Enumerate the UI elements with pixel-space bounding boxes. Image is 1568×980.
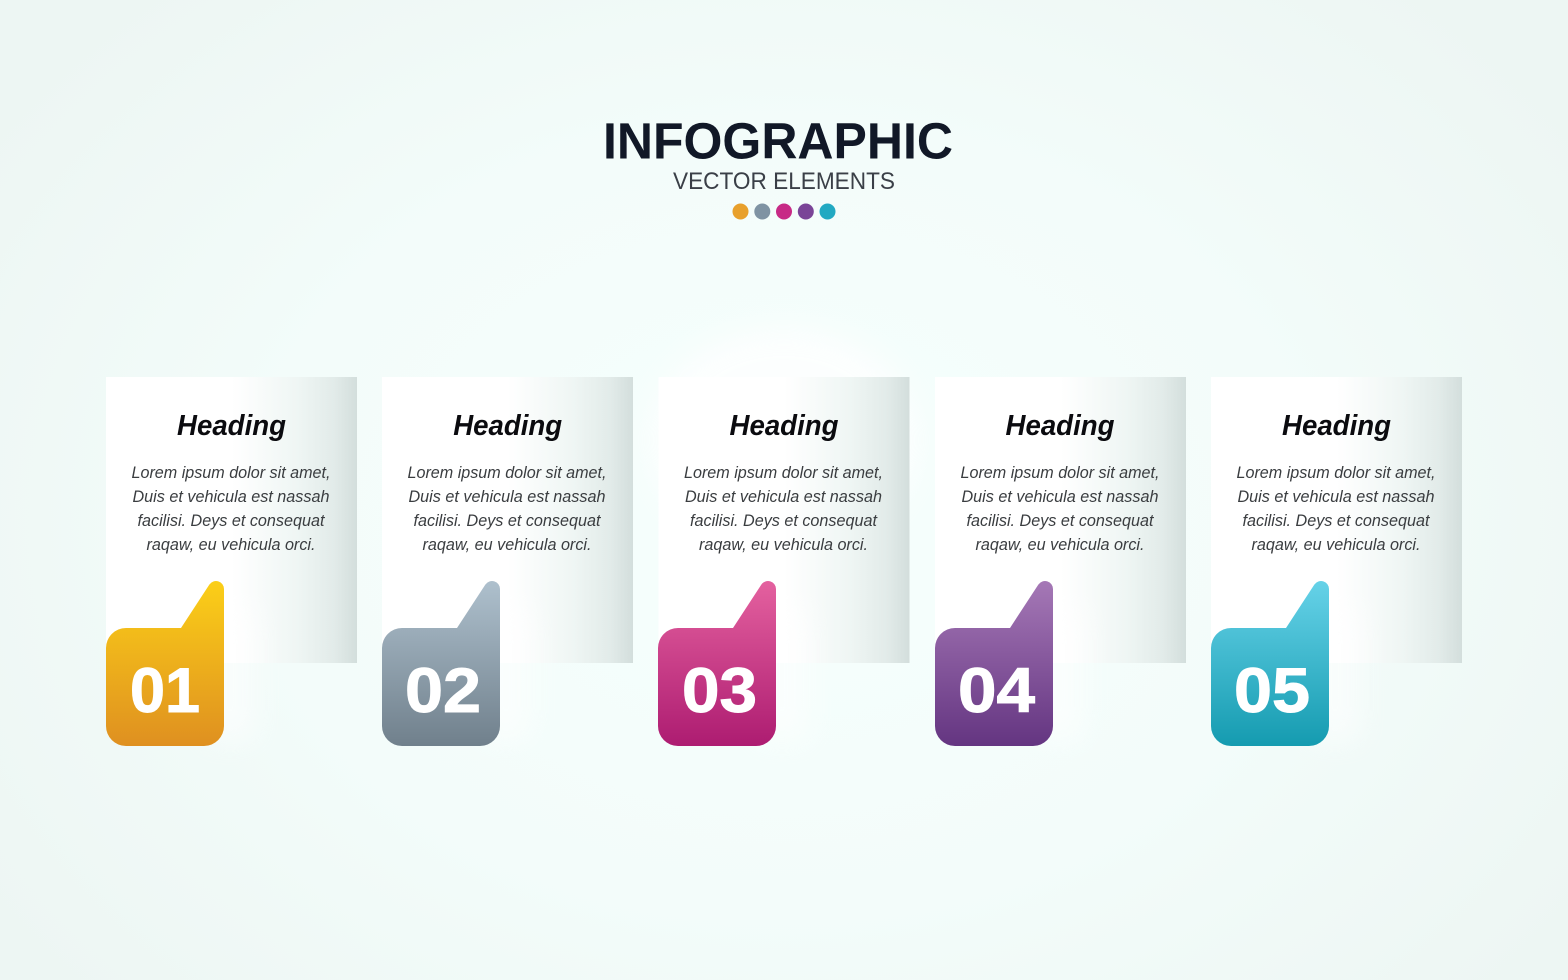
body text (1236, 464, 1436, 554)
body text (684, 464, 883, 554)
title block (603, 112, 953, 220)
body text: Duis et vehicula est nassah (132, 488, 330, 506)
body text: raqaw, eu vehicula orci. (146, 536, 316, 554)
card (106, 377, 357, 663)
colour dots (732, 204, 836, 220)
number tag (935, 581, 1083, 746)
heading: Heading (453, 410, 562, 442)
number tag (658, 581, 806, 746)
body text (960, 464, 1160, 554)
body text: Lorem ipsum dolor sit amet, (1236, 464, 1436, 482)
subtitle: VECTOR ELEMENTS (673, 168, 895, 195)
number tag: 01 (130, 656, 200, 726)
panel: step 05 (1211, 377, 1462, 746)
panel: step 01 (106, 377, 357, 746)
body text (408, 464, 606, 554)
body text: facilisi. Deys et consequat (1242, 512, 1431, 530)
number tag (382, 581, 530, 746)
body text: raqaw, eu vehicula orci. (422, 536, 592, 554)
title: INFOGRAPHIC (603, 112, 953, 170)
card (658, 377, 910, 663)
body text: Lorem ipsum dolor sit amet, (408, 464, 606, 482)
body text: Lorem ipsum dolor sit amet, (960, 464, 1160, 482)
body text: Lorem ipsum dolor sit amet, (132, 464, 330, 482)
heading: Heading (1006, 410, 1115, 442)
body text: Duis et vehicula est nassah (408, 488, 606, 506)
body text: facilisi. Deys et consequat (690, 512, 878, 530)
card (382, 377, 633, 663)
heading: Heading (730, 410, 839, 442)
number tag: 03 (682, 656, 757, 726)
body text (132, 464, 330, 554)
body text: raqaw, eu vehicula orci. (976, 536, 1144, 554)
number tag: 02 (405, 656, 481, 726)
number tag: 04 (958, 656, 1035, 726)
body text: Lorem ipsum dolor sit amet, (684, 464, 883, 482)
body text: raqaw, eu vehicula orci. (1252, 536, 1420, 554)
panel: step 03 (658, 377, 910, 746)
body text: Duis et vehicula est nassah (962, 488, 1158, 506)
number tag (106, 581, 254, 746)
body text: raqaw, eu vehicula orci. (699, 536, 868, 554)
body text: facilisi. Deys et consequat (966, 512, 1155, 530)
card (935, 377, 1186, 663)
panel: step 02 (382, 377, 633, 746)
heading: Heading (1282, 410, 1391, 442)
panel: step 04 (935, 377, 1186, 746)
body text: facilisi. Deys et consequat (138, 512, 326, 530)
card (1211, 377, 1462, 663)
body text: facilisi. Deys et consequat (414, 512, 602, 530)
body text: Duis et vehicula est nassah (1238, 488, 1434, 506)
body text: Duis et vehicula est nassah (685, 488, 882, 506)
number tag: 05 (1234, 656, 1310, 726)
heading: Heading (177, 410, 286, 442)
number tag (1211, 581, 1359, 746)
